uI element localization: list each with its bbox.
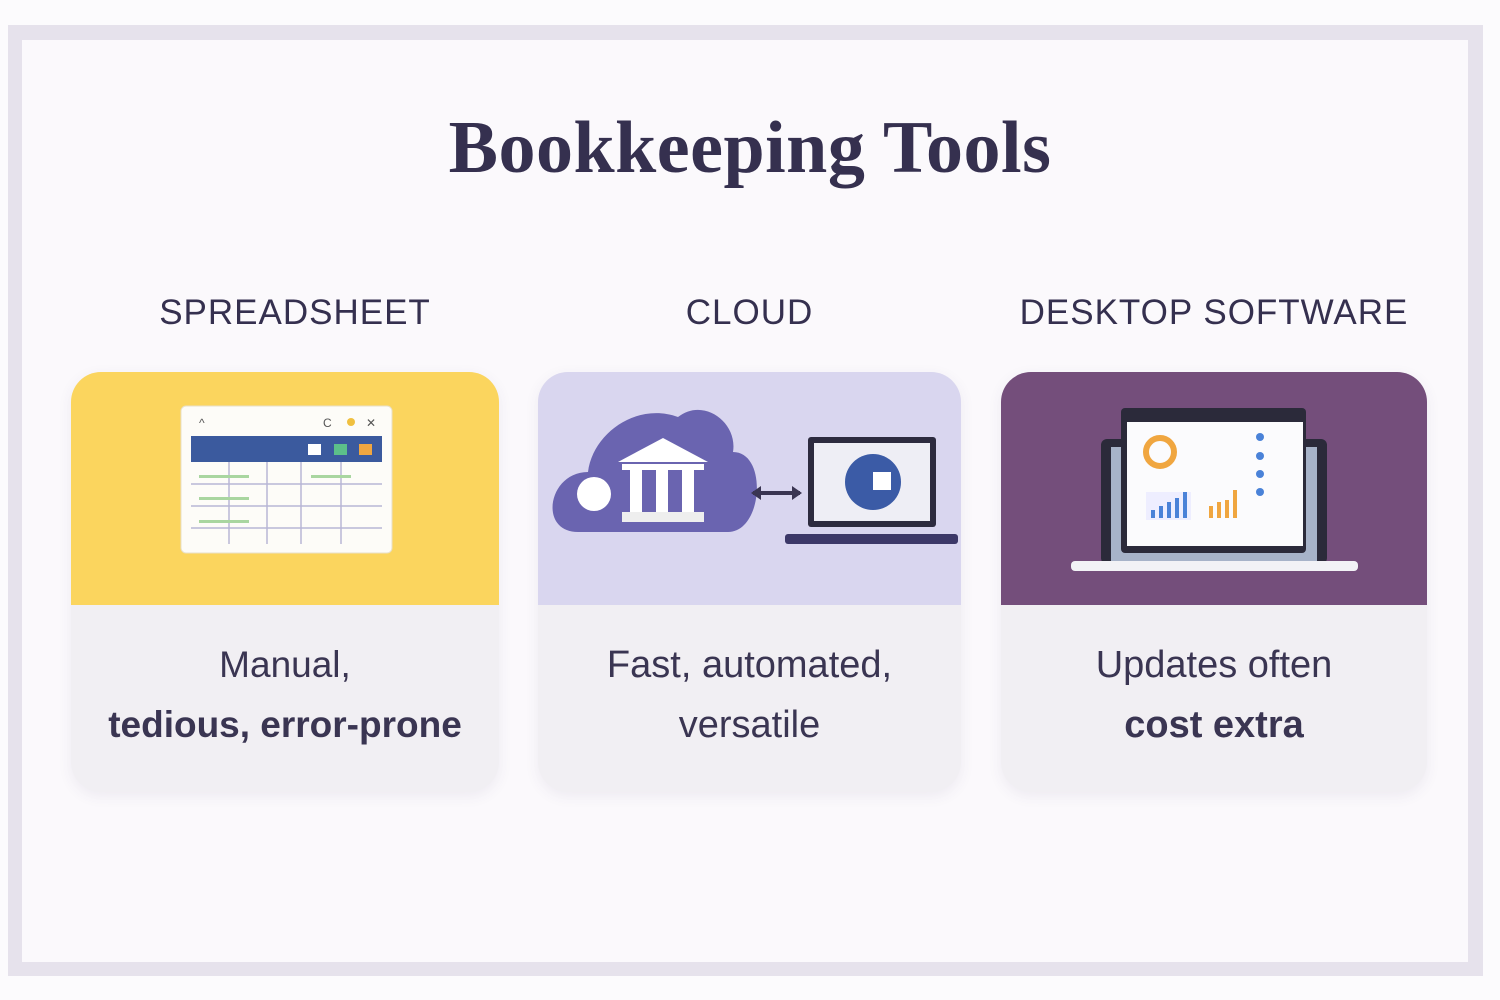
- heading: desktop software: DESKTOP SOFTWARE: [1020, 293, 1408, 332]
- icon: spreadsheet window: [71, 372, 499, 605]
- heading: cloud: CLOUD: [686, 293, 813, 332]
- icon: laptop dashboard: [1001, 372, 1427, 605]
- icon: spreadsheet window: ✕: [366, 416, 376, 430]
- panel: cloud: [538, 372, 961, 792]
- text: spreadsheet: Manual,: [219, 644, 351, 685]
- icon: spreadsheet window: ^: [199, 416, 205, 430]
- text: cloud: versatile: [679, 704, 820, 746]
- title: Bookkeeping Tools: [449, 107, 1051, 189]
- text: cloud: Fast, automated,: [607, 644, 892, 686]
- panel: desktop software: [1001, 372, 1427, 792]
- text: cloud: [607, 644, 892, 746]
- text: desktop software: Updates often: [1096, 644, 1332, 686]
- panel: spreadsheet: [71, 372, 499, 792]
- text: spreadsheet: [108, 644, 462, 745]
- icon: cloud bank and laptop: [538, 372, 961, 605]
- text: desktop software: [1096, 644, 1332, 746]
- icon: spreadsheet window: C: [323, 416, 332, 430]
- text: desktop software: cost extra: [1124, 704, 1304, 746]
- heading: spreadsheet: SPREADSHEET: [159, 293, 431, 332]
- text: spreadsheet: tedious, error-prone: [108, 704, 462, 745]
